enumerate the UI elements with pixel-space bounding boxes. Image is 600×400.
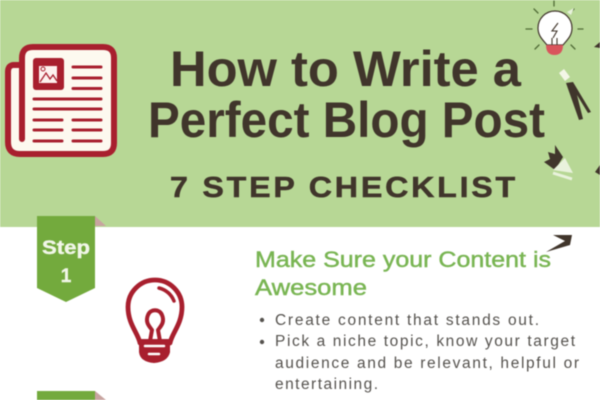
bullet list (260, 312, 579, 393)
step 1 tag: 1 (61, 266, 72, 287)
bullet list: entertaining. (275, 376, 378, 393)
icon: decorative light bulb (526, 1, 583, 55)
section heading (255, 247, 551, 300)
bullet list: Pick a niche topic, know your target (275, 333, 576, 350)
title (148, 41, 545, 148)
icon: newspaper (8, 47, 114, 154)
step 2 tag (37, 391, 106, 400)
icon: decorative brush (544, 145, 573, 179)
title: How to Write a (170, 41, 522, 97)
step 1 tag: Step (42, 238, 90, 259)
subtitle: 7 STEP CHECKLIST (170, 172, 518, 204)
bullet list: audience and be relevant, helpful or (275, 355, 579, 372)
icon: decorative pencil tip (559, 69, 591, 120)
section heading: Make Sure your Content is (255, 247, 551, 272)
section heading: Awesome (255, 275, 367, 300)
header band (0, 0, 600, 227)
bullet list: Create content that stands out. (275, 312, 539, 329)
icon: light bulb (128, 280, 182, 361)
icon: decorative arrow (546, 235, 572, 252)
step 1 tag (37, 216, 106, 302)
title: Perfect Blog Post (148, 92, 545, 148)
icon: decorative edge marks (594, 42, 600, 175)
